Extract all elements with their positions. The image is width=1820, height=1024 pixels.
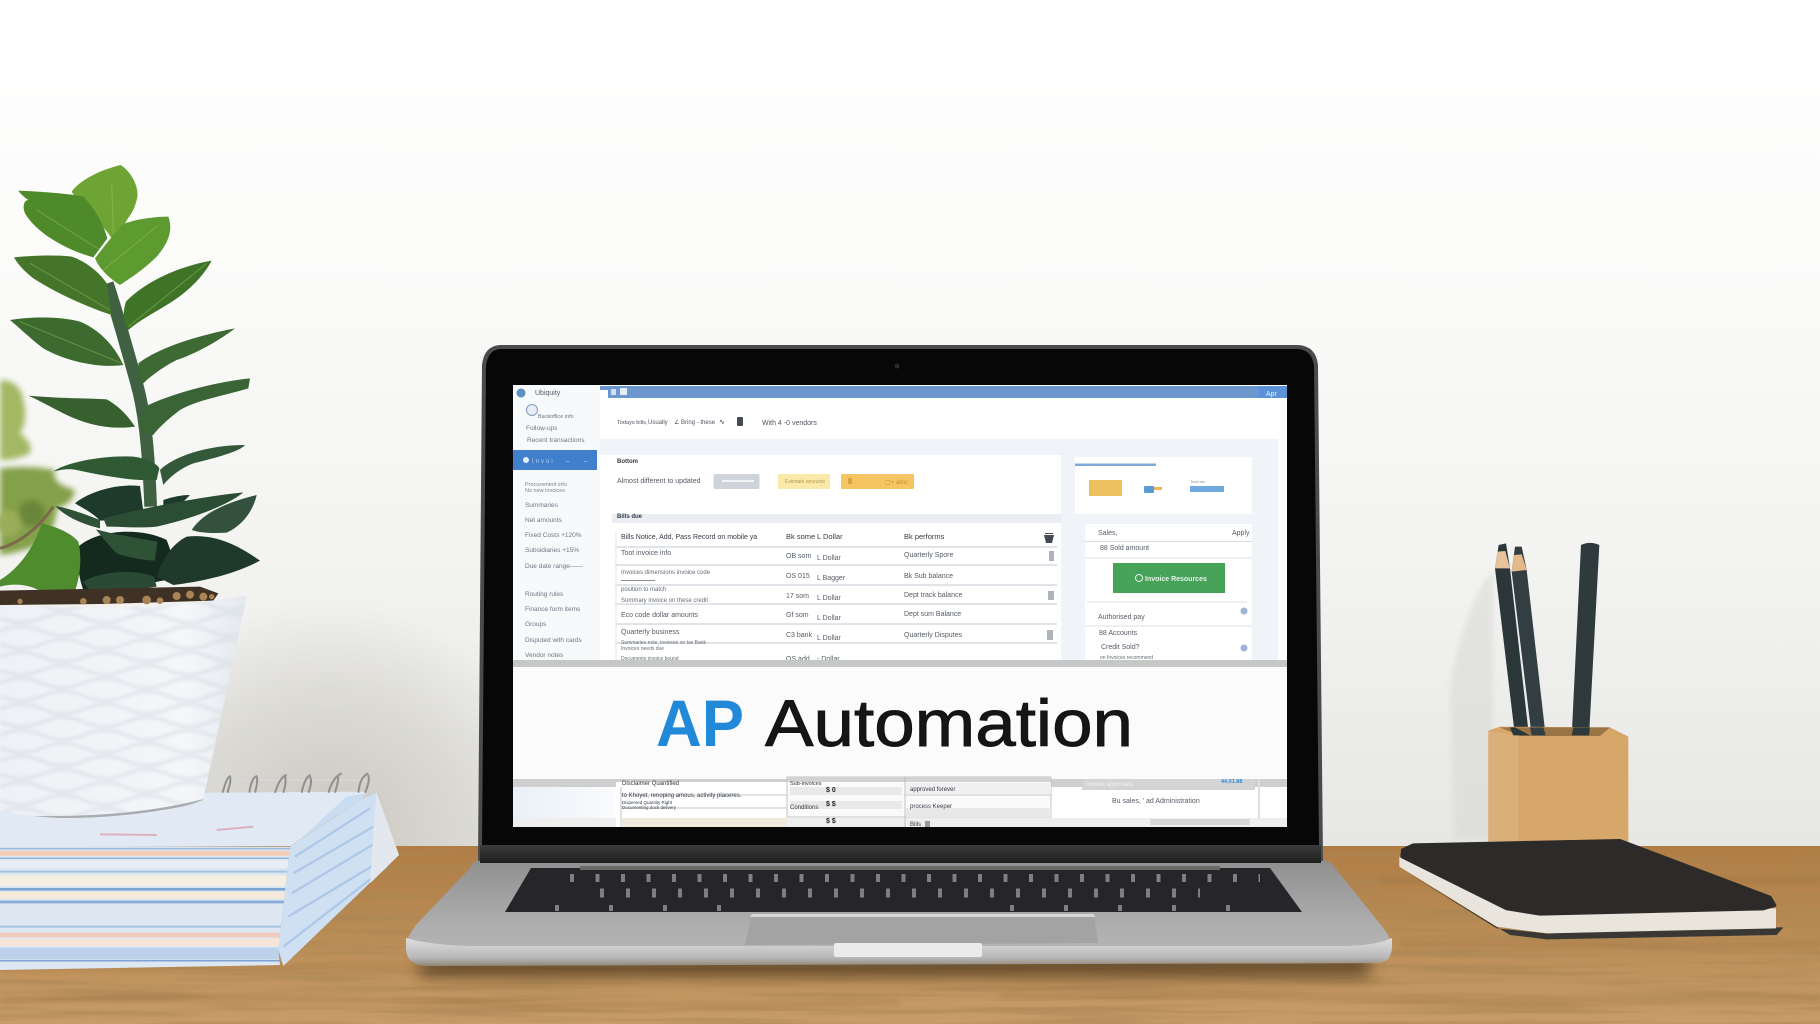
table section heading	[612, 514, 1062, 523]
pencil three	[1572, 543, 1599, 737]
laptop	[406, 345, 1392, 976]
payment card: Credit Sold?	[1101, 644, 1140, 651]
sidebar	[513, 385, 600, 667]
application top bar: Apr	[1266, 391, 1278, 398]
lower table: $ $	[826, 801, 836, 808]
lower table: Dispersed Quantity Right	[622, 800, 673, 805]
lower table: $ $	[826, 818, 836, 825]
title banner	[658, 698, 1129, 747]
payment card: Authorised pay	[1098, 614, 1145, 621]
lower table: Disclaimer Quantified	[622, 781, 679, 787]
notebook cover	[0, 792, 367, 847]
title: AP	[656, 686, 744, 760]
row action icons	[1044, 533, 1054, 640]
plant	[0, 165, 260, 605]
spiral rings	[210, 773, 369, 793]
lower table: $ 0	[826, 787, 836, 794]
invoice table: 17 som	[786, 593, 809, 600]
sidebar: No new invoices	[525, 488, 565, 494]
pen holder with pencils	[1450, 543, 1628, 842]
green action button	[1113, 563, 1225, 593]
laptop base	[406, 860, 1392, 966]
lower table: to Khoyet, renoping amous, activity placeres.	[622, 793, 742, 799]
header strip: Usually	[648, 420, 668, 426]
invoice table: Summary invoice on these credit	[621, 598, 708, 604]
wall shadow	[1450, 570, 1493, 840]
keyboard	[505, 866, 1302, 912]
selected menu item	[513, 450, 597, 470]
invoice table: Documents invoice bound	[621, 656, 679, 662]
moss plant	[0, 380, 75, 555]
sidebar: –	[566, 459, 570, 465]
sidebar: Routing rules	[525, 591, 564, 598]
payment card: 88 Accounts	[1099, 630, 1138, 637]
lower right card: Bu sales, ' ad Administration	[1112, 798, 1200, 805]
invoice table: Gf som	[786, 612, 809, 619]
notebook page stripes	[0, 845, 293, 972]
sidebar: Fixed Costs +120%	[525, 532, 582, 539]
invoice table: position to match	[621, 587, 666, 593]
notebook side pages	[278, 793, 399, 966]
sidebar: Follow-ups	[526, 425, 558, 432]
sidebar: Recent transactions	[527, 437, 585, 444]
invoice table	[615, 523, 1057, 663]
payment card: Apply	[1232, 530, 1250, 537]
sidebar: Backoffice info	[538, 414, 574, 420]
sidebar: Groups	[525, 621, 547, 628]
orange action button	[841, 474, 914, 489]
payment card: Sales,	[1098, 530, 1118, 537]
header strip: ∠ Bring - these	[674, 419, 716, 426]
invoice table: Dept track balance	[904, 592, 962, 599]
lower table: process Keeper	[910, 804, 952, 810]
sidebar: Subsidiaries +15%	[525, 547, 579, 554]
payment card: on Invoices recommend	[1100, 655, 1153, 661]
invoice table: Eco code dollar amounts	[621, 612, 699, 619]
stem	[107, 283, 151, 507]
lower table	[616, 777, 1051, 828]
touchpad	[745, 914, 1098, 945]
invoice table: Bk some	[786, 532, 815, 541]
lower gray band	[513, 660, 1287, 667]
invoice table: L Dollar	[817, 532, 843, 541]
lower right card	[1082, 779, 1260, 825]
invoice table: Bk Sub balance	[904, 573, 953, 580]
invoice table: - Dollar	[817, 656, 840, 663]
lower table: Sub-invoices	[790, 781, 822, 787]
application top bar	[597, 386, 1287, 398]
header strip: With 4 -0 vendors	[762, 420, 817, 427]
invoice table: Invoices dimensions invoice code	[621, 570, 711, 576]
sidebar: Invoi	[532, 459, 555, 465]
invoice table: L Dollar	[817, 615, 842, 622]
invoice table: Dept sum Balance	[904, 611, 961, 618]
lower right card: Invoice approvals	[1086, 782, 1133, 788]
lower table: approved forever	[910, 787, 955, 793]
title: Automation	[765, 686, 1133, 760]
wooden desk	[0, 846, 1820, 1024]
sidebar: Procurement info	[525, 482, 567, 488]
user avatar	[526, 404, 538, 416]
webcam	[895, 364, 899, 368]
invoice table: Toot invoice info	[621, 550, 671, 557]
sidebar: Ubiquity	[535, 390, 561, 397]
lower partial screen	[513, 777, 1287, 828]
payment card	[1085, 524, 1252, 661]
invoices panel	[600, 455, 1062, 663]
header strip: ∿	[719, 419, 725, 426]
laptop lid	[478, 345, 1323, 863]
sidebar: Net amounts	[525, 517, 563, 524]
invoice table: L Dollar	[817, 635, 842, 642]
black notebook	[1399, 841, 1783, 939]
title	[658, 698, 1129, 747]
invoice table: OS add	[786, 656, 810, 663]
payment card: 88 Sold amount	[1100, 545, 1149, 552]
orange action button: ▢+ alloc	[885, 480, 908, 486]
grey action button	[714, 474, 760, 489]
lower table: Bills	[910, 822, 921, 828]
invoice table: C3 bank	[786, 632, 813, 639]
yellow action button	[778, 474, 830, 489]
leaf veins	[20, 183, 207, 363]
invoice table: OB som	[786, 553, 811, 560]
pencil one	[1495, 543, 1529, 736]
sidebar: Finance form items	[525, 606, 581, 613]
lower right card: 44.01.88	[1221, 779, 1242, 785]
invoice table: Summaries note, invoices on tax Bank	[621, 640, 707, 646]
leaves	[0, 165, 260, 603]
header strip	[617, 417, 817, 426]
pencil two	[1512, 547, 1546, 736]
wooden holder	[1488, 727, 1628, 842]
white ceramic pot	[0, 590, 250, 825]
invoice table: Bills Notice, Add, Pass Record on mobile ya	[621, 534, 757, 541]
sidebar: Due date range——	[525, 563, 583, 570]
summary card	[1075, 457, 1252, 514]
soil	[0, 587, 218, 605]
invoices panel: Almost different to updated	[617, 478, 701, 485]
lower table: Conditions	[790, 805, 818, 811]
invoice table: Invoices needs due	[621, 646, 664, 652]
invoice table: L Dollar	[817, 595, 842, 602]
main background	[600, 439, 1278, 660]
summary card: Total tax	[1190, 479, 1205, 484]
logo	[516, 388, 526, 398]
invoice table: Quarterly Spore	[904, 552, 954, 559]
sidebar: –	[584, 459, 588, 465]
invoice table: L Dollar	[817, 555, 842, 562]
sidebar: Vendor notes	[525, 652, 564, 659]
green action button: Invoice Resources	[1145, 576, 1207, 583]
desk shadow	[420, 958, 1370, 976]
header strip: Todays bills,	[617, 420, 648, 426]
laptop screen	[513, 385, 1287, 828]
invoices panel: Bottom	[617, 459, 638, 465]
invoice table: Quarterly business	[621, 629, 680, 636]
invoice table: Quarterly Disputes	[904, 632, 962, 639]
front notch	[834, 943, 982, 957]
invoice table: L Bagger	[817, 575, 846, 582]
sidebar: Summaries	[525, 502, 559, 509]
sidebar: Disputed with cards	[525, 637, 582, 644]
invoice table: OS 015	[786, 573, 810, 580]
invoice table: Bk performs	[904, 532, 945, 541]
lower table: Documenting dock delivery	[622, 805, 677, 810]
invoices panel: Bills due	[617, 514, 643, 520]
notebook with spiral binding	[0, 773, 399, 972]
yellow action button: Estimate amounts	[785, 479, 826, 485]
